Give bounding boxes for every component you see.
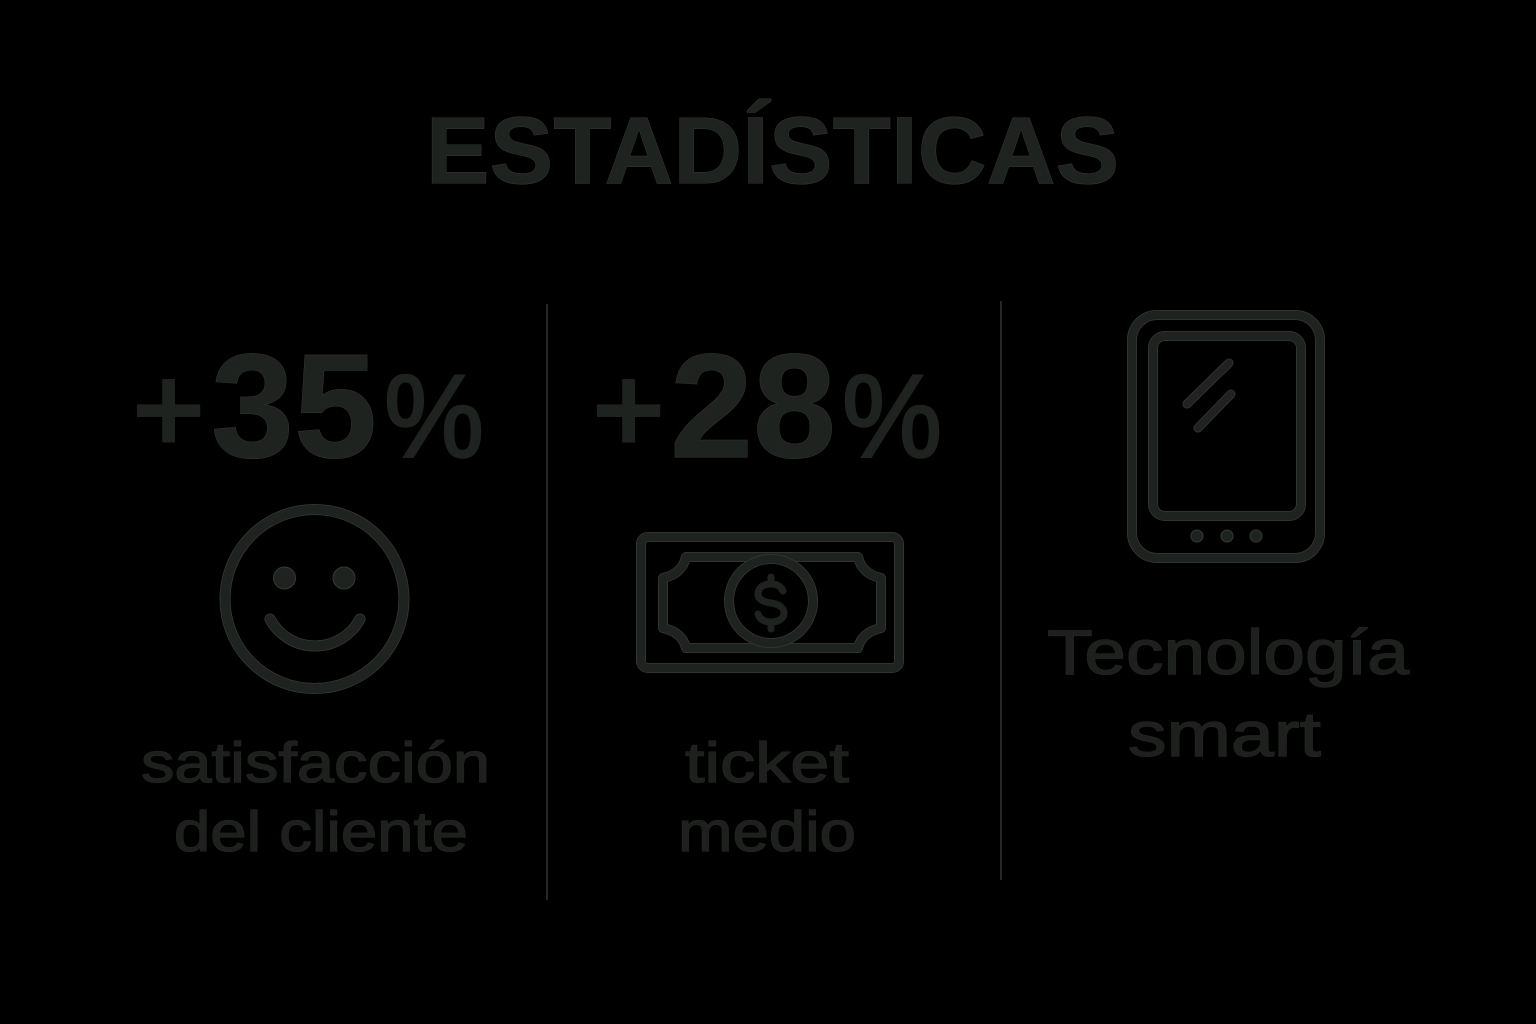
- panel: smart technology: [1047, 315, 1410, 770]
- icon: smiley face: [225, 510, 404, 688]
- label: ticket medio: ticket: [685, 731, 849, 795]
- stat: +28%: +: [593, 341, 664, 477]
- label: Tecnología smart: smart: [1128, 700, 1322, 770]
- stat: +35%: +: [133, 341, 204, 477]
- title: ESTADÍSTICAS: [426, 98, 1119, 204]
- stat: +28%: 28: [670, 324, 836, 489]
- label: satisfacción del cliente: del cliente: [174, 800, 468, 864]
- stat: +35%: %: [384, 351, 484, 483]
- label: ticket medio: [678, 731, 856, 864]
- stat: +28%: %: [842, 351, 942, 483]
- label: Tecnología smart: Tecnología: [1047, 618, 1410, 688]
- divider: right: [1000, 301, 1002, 880]
- label: satisfacción del cliente: satisfacción: [141, 731, 490, 795]
- label: satisfacción del cliente: [141, 731, 490, 864]
- stat: +35%: [133, 324, 484, 489]
- icon: banknote: [641, 537, 899, 668]
- stat: +35%: 35: [211, 324, 377, 489]
- stat: +28%: [593, 324, 942, 489]
- icon: tablet: [1132, 315, 1320, 558]
- panel: average ticket: [593, 324, 942, 864]
- label: Tecnología smart: [1047, 618, 1410, 770]
- panel: satisfaction: [133, 324, 490, 864]
- divider: left: [546, 304, 548, 900]
- label: ticket medio: medio: [678, 800, 856, 864]
